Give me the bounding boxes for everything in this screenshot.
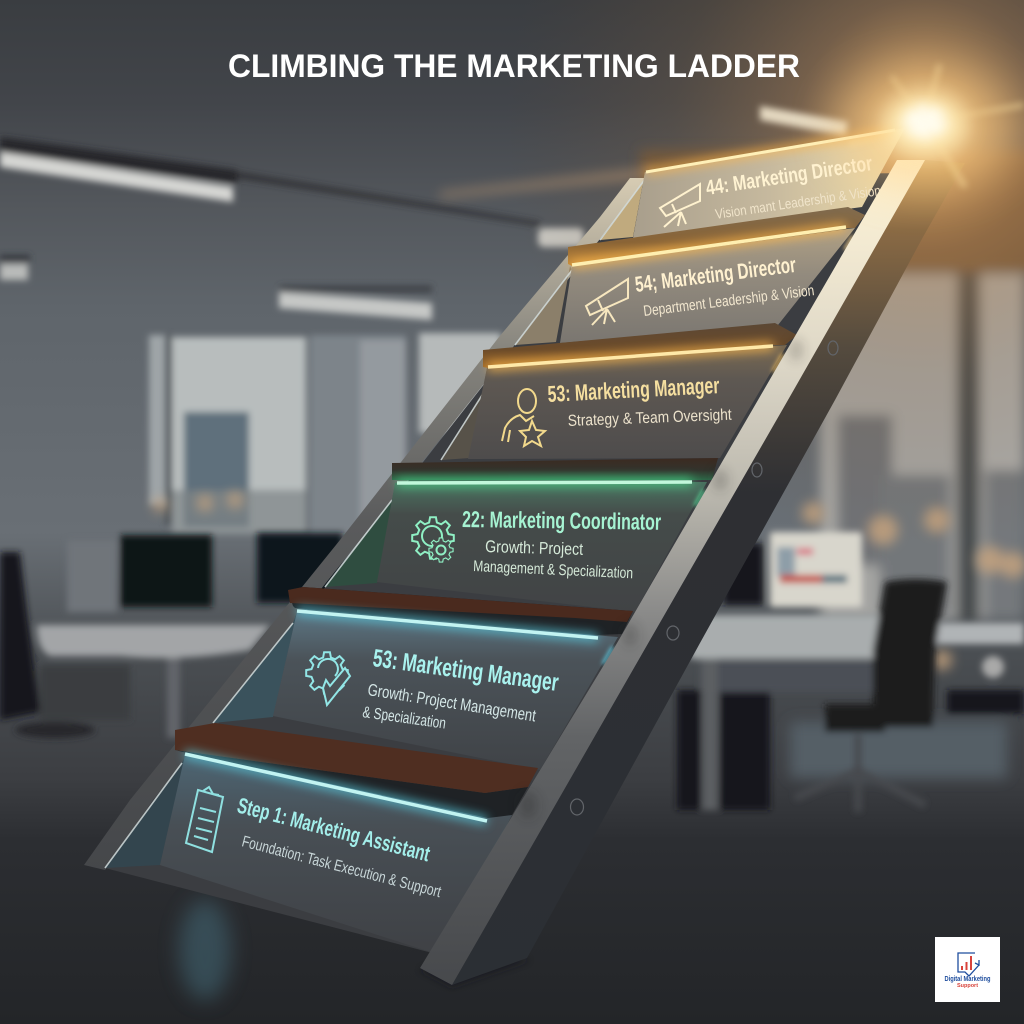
- icon: telescope: [586, 279, 628, 325]
- ceiling and lights: [0, 137, 584, 320]
- tread: [568, 207, 865, 266]
- right windows with skyline: [640, 150, 1024, 622]
- step 2 panel: Marketing Manager: [273, 587, 633, 770]
- inner side wedges: [105, 172, 646, 868]
- left desks and monitors: [0, 533, 343, 738]
- step 2 panel: Marketing Manager: & Specialization: [361, 704, 447, 733]
- rail outer dark face: [452, 160, 965, 985]
- glow strip: [297, 611, 598, 638]
- step 3 panel: Marketing Coordinator: Management & Specialization: [473, 558, 633, 582]
- bokeh city lights: [153, 492, 1024, 670]
- ladder frame: [84, 172, 918, 955]
- step 6 panel: top Marketing Director: [633, 128, 905, 238]
- left window with skyline: [149, 333, 501, 550]
- icon: gears: [412, 517, 454, 562]
- step 2 panel: Marketing Manager: Growth: Project Management: [366, 680, 537, 726]
- glow strip: [572, 227, 846, 265]
- icon: gear with check: [306, 652, 350, 705]
- foot shadow: [420, 950, 530, 987]
- step 3 panel: Marketing Coordinator: [377, 458, 718, 612]
- step 4 panel: Marketing Manager: [468, 323, 797, 459]
- right rail: [420, 160, 965, 987]
- warm light streak: [440, 168, 650, 198]
- tread: [392, 458, 718, 480]
- rivets: [570, 341, 838, 815]
- sun flare: [835, 64, 1024, 188]
- rail inner light face: [420, 160, 925, 985]
- title: CLIMBING THE MARKETING LADDER: [228, 48, 800, 84]
- step 6 panel: top Marketing Director: 44: Marketing Director: [704, 152, 874, 200]
- icon: person with star: [502, 389, 545, 446]
- tread shadows on rail: [519, 339, 802, 819]
- step 2 panel: Marketing Manager: 53: Marketing Manager: [371, 644, 560, 697]
- tread: [288, 587, 633, 635]
- logo badge: Support: [957, 983, 978, 989]
- glow strip: [397, 482, 692, 483]
- glow strip: [185, 754, 487, 821]
- glow strip: [488, 346, 773, 367]
- icon: chart bubble: [958, 953, 979, 976]
- step 3 panel: Marketing Coordinator: 22: Marketing Coordinator: [462, 506, 661, 535]
- right desk, monitor and chair: [677, 532, 1024, 812]
- inner back wall: [105, 173, 918, 955]
- floor blue reflection: [179, 900, 231, 1000]
- step 5 panel: Marketing Director: Department Leadership & Vision: [642, 282, 815, 320]
- side glows under treads: [498, 236, 853, 852]
- left rail: [84, 178, 648, 870]
- tread: [483, 323, 797, 368]
- step 5 panel: Marketing Director: [560, 207, 865, 343]
- logo badge: [935, 937, 1000, 1002]
- step 5 panel: Marketing Director: 54; Marketing Director: [633, 252, 798, 297]
- icon: clipboard: [186, 787, 223, 852]
- sun glow behind ladder: [380, 0, 1024, 545]
- step 1 panel: Marketing Assistant: Foundation: Task Execution & Support: [240, 833, 443, 901]
- step 4 panel: Marketing Manager: Strategy & Team Oversight: [568, 407, 733, 430]
- icon: telescope: [660, 184, 700, 227]
- step 1 panel: Marketing Assistant: [160, 723, 538, 955]
- logo badge: Digital Marketing: [944, 976, 990, 983]
- step 6 panel: top Marketing Director: Vision mant Leadership & Vision: [714, 182, 882, 222]
- step 1 panel: Marketing Assistant: Step 1: Marketing Assistant: [235, 793, 433, 867]
- step 3 panel: Marketing Coordinator: Growth: Project: [485, 537, 584, 559]
- tread: [175, 750, 528, 818]
- step 4 panel: Marketing Manager: 53: Marketing Manager: [547, 372, 720, 407]
- lit ceiling light: [760, 106, 848, 136]
